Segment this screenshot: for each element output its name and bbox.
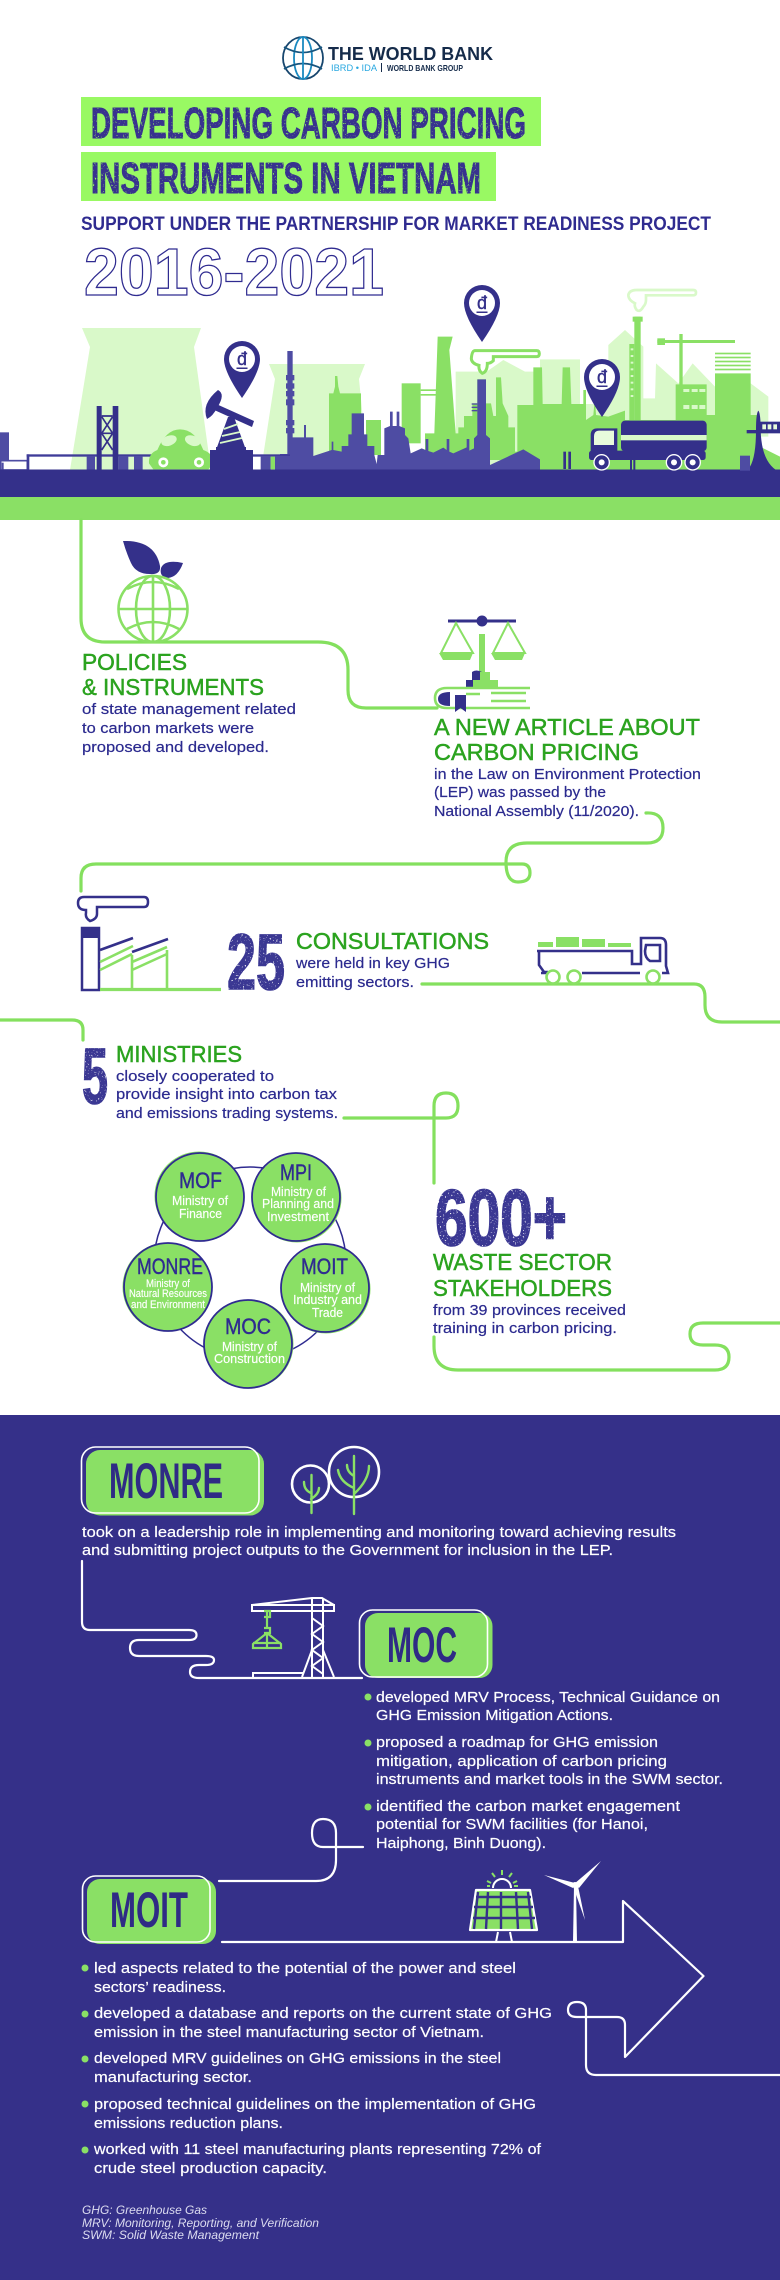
MONRE description: took on a leadership role in implementing and monitoring toward achieving results xyxy=(82,1524,676,1541)
circle: MOF xyxy=(154,1152,244,1241)
connecting ring xyxy=(154,1167,346,1359)
waste sector description: training in carbon pricing. xyxy=(433,1320,617,1337)
MOC badge: MOC xyxy=(387,1617,457,1673)
logo subline: WORLD BANK GROUP xyxy=(387,63,463,73)
number 600+: 600+ xyxy=(435,1173,567,1262)
logo subline xyxy=(331,63,463,74)
waste sector description: from 39 provinces received xyxy=(433,1302,626,1319)
connector line 6 xyxy=(434,1323,780,1370)
crane frame xyxy=(252,1598,334,1678)
circle: MONRE: Ministry of xyxy=(146,1278,191,1290)
MOC bullet 3: identified the carbon market engagement xyxy=(376,1798,681,1815)
map pin 1: đ xyxy=(237,349,247,369)
ministries description xyxy=(116,1068,338,1122)
dark ground band xyxy=(0,470,780,497)
MONRE badge xyxy=(82,1447,264,1516)
years outline: 2016-2021 xyxy=(84,235,384,310)
title line 2: INSTRUMENTS IN VIETNAM xyxy=(91,154,481,203)
circle: MPI: Planning and xyxy=(262,1197,334,1211)
connector line 3 xyxy=(422,984,780,1022)
MOIT bullet 3: manufacturing sector. xyxy=(94,2069,252,2086)
icon: oil pump jack xyxy=(205,390,254,471)
ministries description: and emissions trading systems. xyxy=(116,1105,338,1122)
logo wordmark: THE WORLD BANK xyxy=(328,44,493,64)
icon: globe with leaves xyxy=(118,541,188,642)
big leaf xyxy=(123,541,160,574)
new article heading: CARBON PRICING xyxy=(434,739,639,765)
policies heading: POLICIES xyxy=(82,649,187,675)
MOIT bullet 5: worked with 11 steel manufacturing plants representing 72% of xyxy=(93,2141,542,2158)
circle: MOC: MOC xyxy=(225,1314,271,1339)
icon: trees xyxy=(292,1447,379,1514)
logo: The World Bank xyxy=(283,37,493,79)
MONRE description: and submitting project outputs to the Government for inclusion in the LEP. xyxy=(82,1542,613,1559)
MOC bullet 3 xyxy=(364,1798,681,1852)
MOIT bullet 5 xyxy=(82,2141,542,2177)
map pin 1 xyxy=(224,341,260,398)
connector line 2 with loop xyxy=(81,813,663,891)
icon: scales on book xyxy=(435,616,530,712)
panel background xyxy=(0,1415,780,2280)
new article description: (LEP) was passed by the xyxy=(434,784,606,801)
circle: MOC: Ministry of xyxy=(222,1340,278,1354)
book xyxy=(435,688,530,712)
mid green buildings, right xyxy=(540,317,780,470)
policies description: to carbon markets were xyxy=(82,720,254,737)
MOC bullet 2 xyxy=(364,1734,723,1788)
connector line 1 xyxy=(81,520,437,708)
map pin 3: đ xyxy=(597,367,607,387)
small leaf xyxy=(161,562,183,578)
policies description: proposed and developed. xyxy=(82,739,269,756)
factory roof and walls xyxy=(100,938,221,990)
MOIT badge: MOIT xyxy=(110,1882,188,1938)
MOC bullet 2: mitigation, application of carbon pricing xyxy=(376,1753,667,1770)
consultations heading: CONSULTATIONS xyxy=(296,928,489,954)
circle: MOIT xyxy=(281,1244,370,1334)
footnotes xyxy=(82,2203,319,2242)
MOC bullet 3: potential for SWM facilities (for Hanoi, xyxy=(376,1816,648,1833)
circle: MPI: MPI xyxy=(280,1160,312,1185)
circle: MOIT: MOIT xyxy=(301,1254,348,1279)
circle: MOC: Construction xyxy=(214,1352,285,1366)
MOIT bullet 3: developed MRV guidelines on GHG emissions in the steel xyxy=(94,2050,501,2067)
number 25: 25 xyxy=(227,917,285,1006)
cooling towers, light green xyxy=(70,328,368,470)
light green background, right xyxy=(540,290,768,437)
title xyxy=(81,97,541,203)
sun xyxy=(487,1870,518,1888)
circle: MONRE: MONRE xyxy=(137,1254,203,1279)
scale xyxy=(439,616,525,674)
MOIT bullet list xyxy=(82,1960,552,2177)
ministries description: closely cooperated to xyxy=(116,1068,274,1085)
connector line 4 xyxy=(0,1020,83,1040)
circle: MOIT: Industry and xyxy=(293,1293,362,1307)
panel: agency roles xyxy=(0,1415,780,2280)
circle: MOIT: Ministry of xyxy=(300,1281,356,1295)
icon: car xyxy=(149,429,213,469)
connector line: MONRE to MOC xyxy=(82,1561,362,1678)
title highlight line 1 xyxy=(81,97,541,146)
policies heading xyxy=(82,649,264,700)
icon: globe xyxy=(283,37,323,79)
MOC bullet 1: developed MRV Process, Technical Guidance on xyxy=(376,1689,720,1706)
map pin 3 xyxy=(584,359,620,417)
new article description xyxy=(434,766,701,820)
footnotes: MRV: Monitoring, Reporting, and Verification xyxy=(82,2216,319,2230)
consultations description: emitting sectors. xyxy=(296,974,414,991)
bridge tower right xyxy=(740,411,780,471)
circle: MOC xyxy=(204,1300,294,1388)
scale base xyxy=(466,670,498,687)
circle: MONRE: Natural Resources xyxy=(129,1288,207,1300)
MOIT bullet 2: emission in the steel manufacturing sector of Vietnam. xyxy=(94,2024,484,2041)
new article heading xyxy=(434,714,700,765)
left rail and bridge tower xyxy=(0,406,292,471)
ministries description: provide insight into carbon tax xyxy=(116,1086,338,1103)
green strip xyxy=(0,497,780,520)
circle: MPI: Investment xyxy=(267,1210,330,1224)
connector line: MOC to MOIT xyxy=(219,1819,363,1881)
waste sector description xyxy=(433,1302,626,1337)
MOIT bullet 4 xyxy=(82,2096,536,2132)
MOIT badge xyxy=(82,1876,216,1944)
consultations description xyxy=(295,955,450,991)
MOC bullet list xyxy=(364,1689,723,1852)
MOIT bullet 3 xyxy=(82,2050,501,2086)
waste sector heading: WASTE SECTOR xyxy=(433,1249,612,1275)
ministries heading: MINISTRIES xyxy=(116,1041,242,1067)
circle: MPI xyxy=(252,1153,342,1242)
MOC bullet 1: GHG Emission Mitigation Actions. xyxy=(376,1707,613,1724)
waste sector heading xyxy=(433,1249,612,1301)
MOC bullet 2: instruments and market tools in the SWM sector. xyxy=(376,1771,723,1788)
policies description xyxy=(82,701,296,756)
number 5: 5 xyxy=(82,1031,108,1120)
skyline illustration xyxy=(0,285,780,520)
MOIT bullet 5: crude steel production capacity. xyxy=(94,2160,327,2177)
circle: MOF: MOF xyxy=(179,1168,222,1193)
wheels xyxy=(546,970,660,984)
policies heading: & INSTRUMENTS xyxy=(82,674,264,700)
MOC bullet 1 xyxy=(364,1689,720,1724)
MOC bullet 3: Haiphong, Binh Duong). xyxy=(376,1835,546,1852)
MONRE description xyxy=(82,1524,676,1559)
MOIT bullet 2: developed a database and reports on the current state of GHG xyxy=(94,2005,552,2022)
new article heading: A NEW ARTICLE ABOUT xyxy=(434,714,700,740)
panel xyxy=(470,1890,537,1942)
circle: MONRE xyxy=(122,1242,212,1332)
factory smoke xyxy=(78,897,148,921)
connector line 5 with loop xyxy=(344,1093,458,1183)
new article description: in the Law on Environment Protection xyxy=(434,766,701,783)
title highlight line 2 xyxy=(81,152,496,201)
MOC badge xyxy=(360,1610,492,1678)
footnotes: SWM: Solid Waste Management xyxy=(82,2228,260,2242)
circle: MPI: Ministry of xyxy=(271,1185,327,1199)
crane load xyxy=(253,1611,281,1648)
icon: tower crane xyxy=(252,1598,334,1678)
map pin 2: đ xyxy=(477,293,487,313)
circle: MOIT: Trade xyxy=(312,1306,343,1320)
title line 1: DEVELOPING CARBON PRICING xyxy=(91,99,526,148)
icon: cargo truck xyxy=(537,937,668,984)
truck body xyxy=(537,938,668,973)
subtitle: SUPPORT UNDER THE PARTNERSHIP FOR MARKET READINESS PROJECT xyxy=(81,213,711,235)
MONRE badge: MONRE xyxy=(109,1453,223,1509)
MOIT bullet 1 xyxy=(82,1960,516,1996)
policies description: of state management related xyxy=(82,701,296,718)
ministries diagram xyxy=(122,1152,370,1388)
MOIT bullet 1: sectors’ readiness. xyxy=(94,1979,226,1996)
waste sector heading: STAKEHOLDERS xyxy=(433,1275,612,1301)
mid green buildings, centre xyxy=(329,337,540,460)
foreground posts xyxy=(563,452,635,470)
MOC bullet 2: proposed a roadmap for GHG emission xyxy=(376,1734,658,1751)
purple factory silhouette xyxy=(280,351,540,472)
arrow outline xyxy=(222,1901,780,2075)
logo subline: IBRD • IDA xyxy=(331,63,378,74)
MOIT bullet 4: emissions reduction plans. xyxy=(94,2115,283,2132)
cargo boxes xyxy=(538,937,631,947)
MOIT bullet 1: led aspects related to the potential of the power and steel xyxy=(94,1960,516,1977)
footnotes: GHG: Greenhouse Gas xyxy=(82,2203,207,2217)
map pin 2 xyxy=(464,285,500,342)
icon: factory xyxy=(78,897,221,990)
icon: tanker truck xyxy=(589,421,707,471)
circle: MOF: Ministry of xyxy=(172,1194,229,1208)
icon: wind turbine xyxy=(544,1861,601,1942)
new article description: National Assembly (11/2020). xyxy=(434,803,639,820)
circle: MONRE: and Environment xyxy=(131,1299,205,1311)
icon: solar panel xyxy=(470,1870,537,1942)
MOIT bullet 2 xyxy=(82,2005,552,2041)
light green background, centre xyxy=(456,360,540,470)
chimney xyxy=(81,927,100,990)
MOIT bullet 4: proposed technical guidelines on the implementation of GHG xyxy=(94,2096,536,2113)
globe xyxy=(118,576,188,642)
consultations description: were held in key GHG xyxy=(295,955,450,972)
circle: MOF: Finance xyxy=(179,1207,222,1221)
